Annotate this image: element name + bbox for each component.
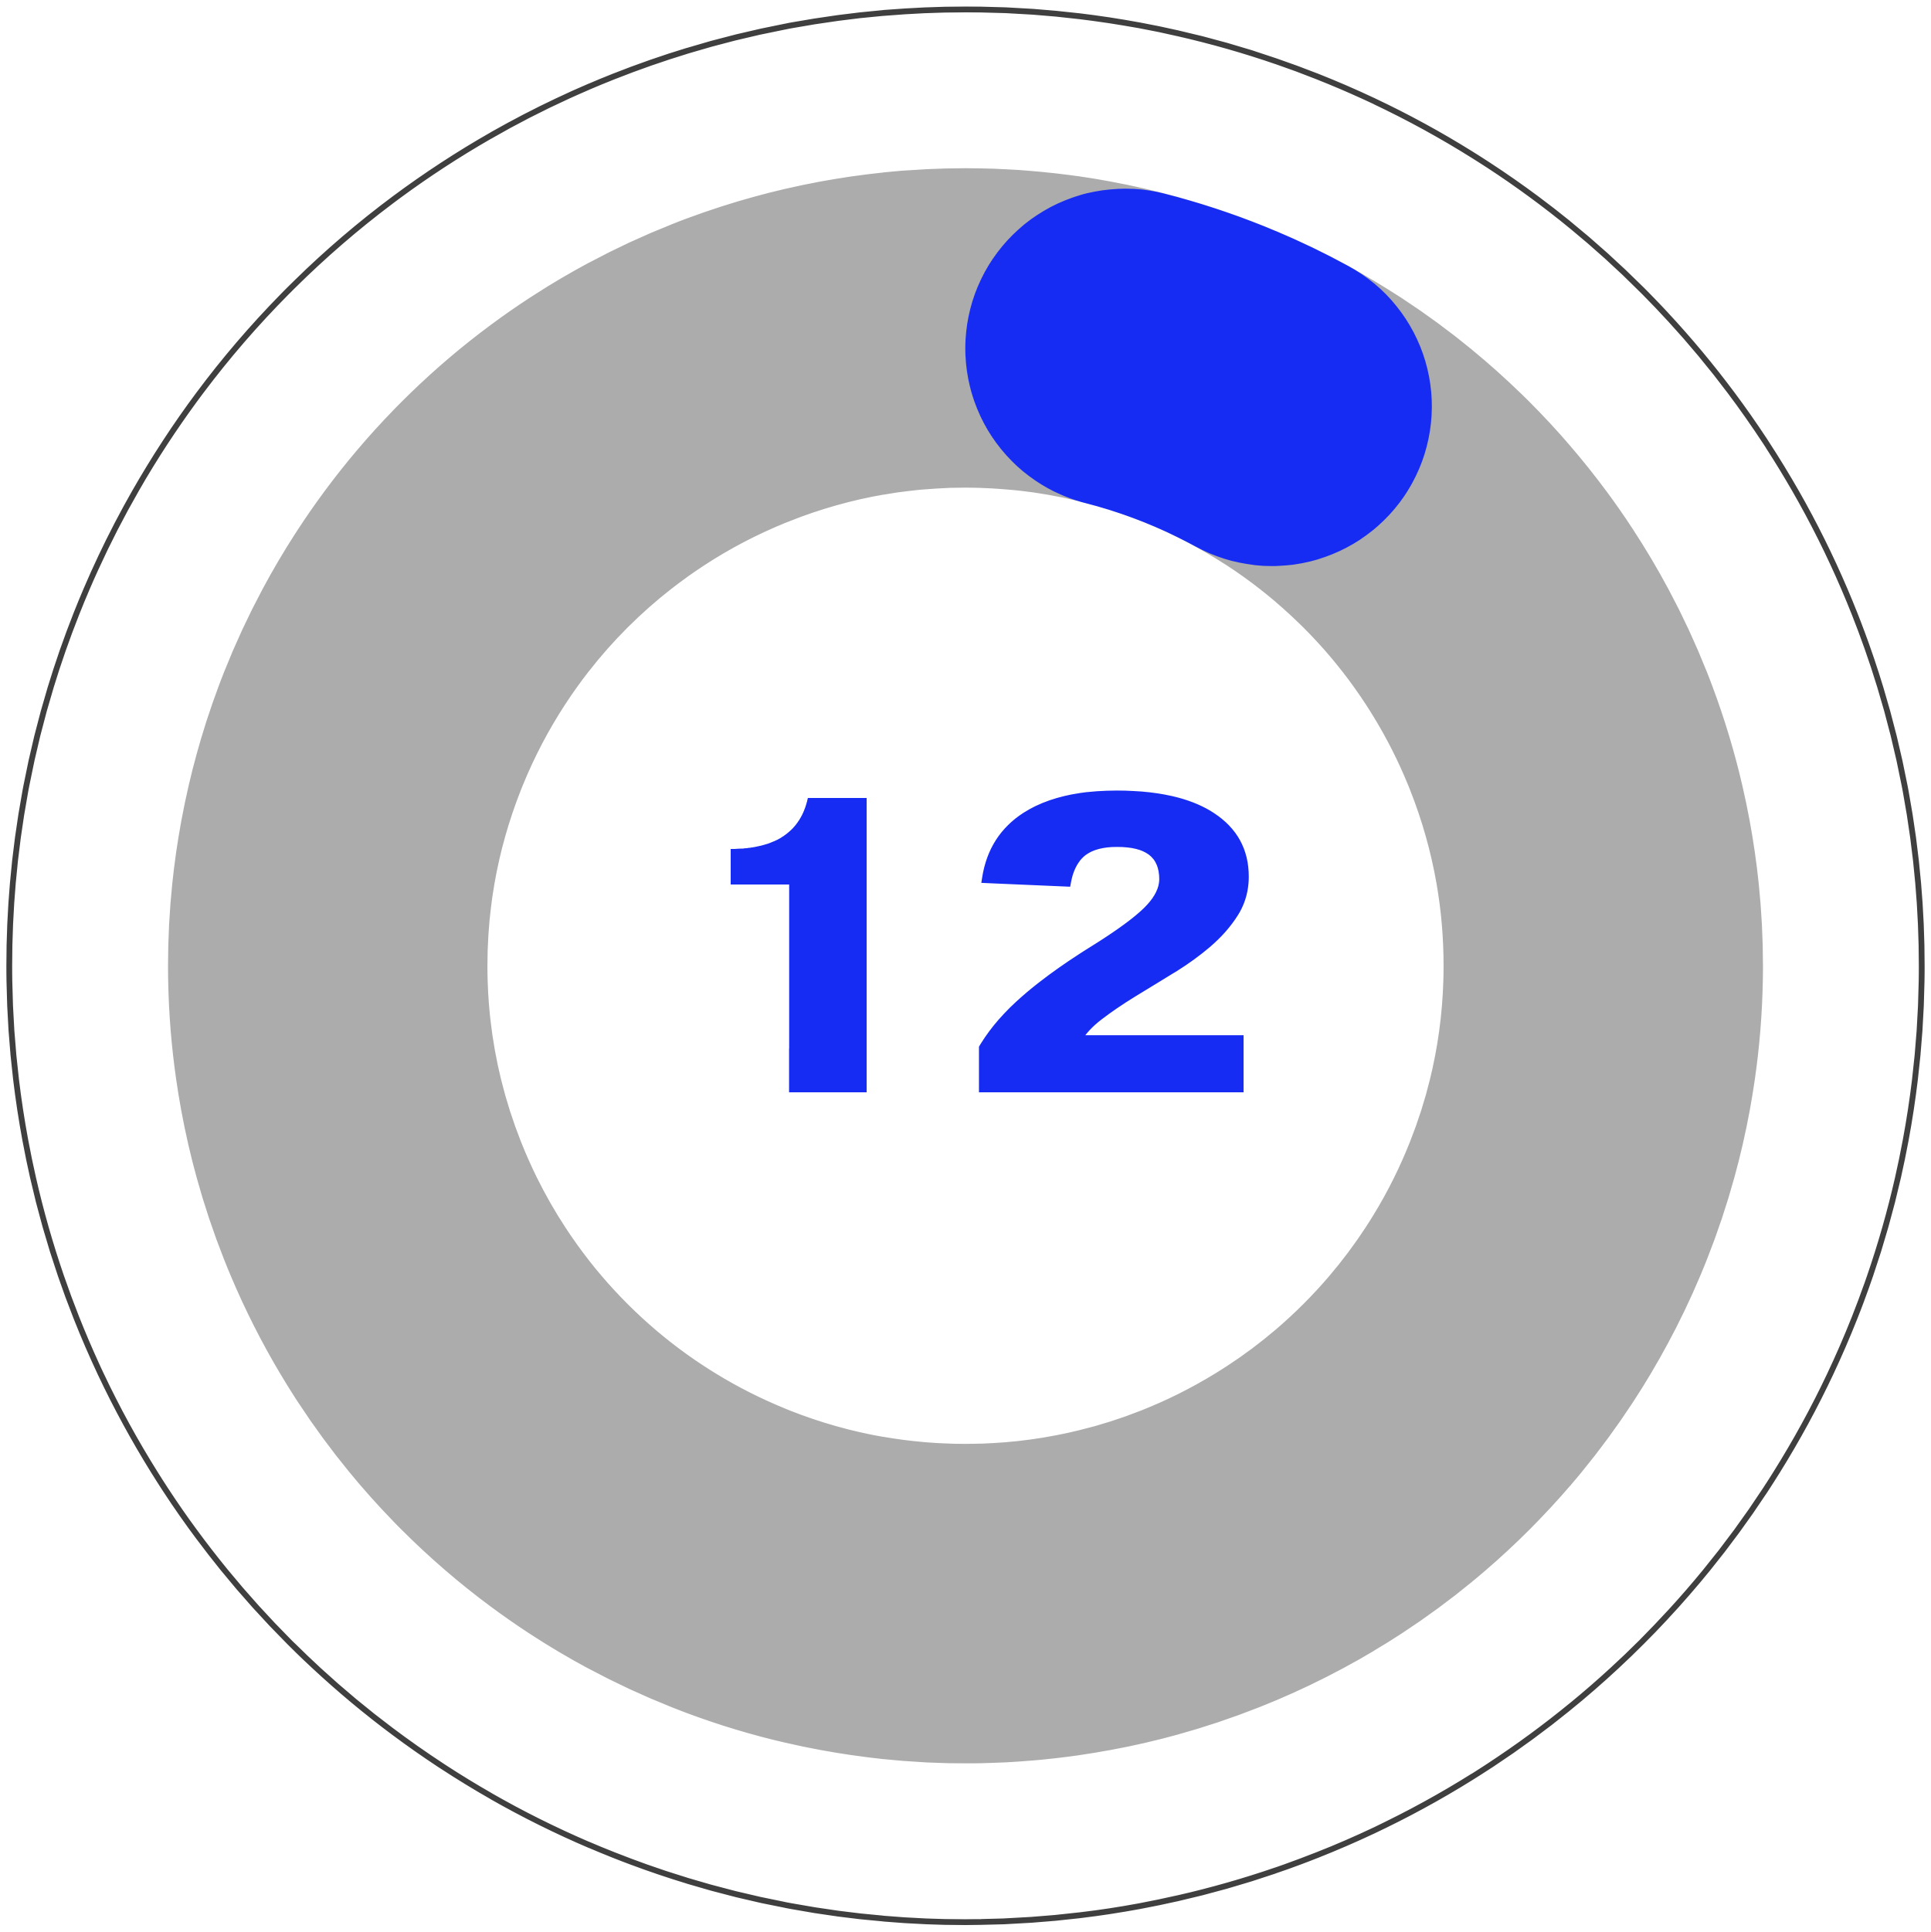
digit 1: 1 [670, 705, 975, 1183]
grey progress track ring [327, 328, 1604, 1604]
blue progress arc [1125, 348, 1272, 406]
digit 2: 2 [967, 710, 1270, 1177]
center number 12 [731, 790, 1249, 1092]
